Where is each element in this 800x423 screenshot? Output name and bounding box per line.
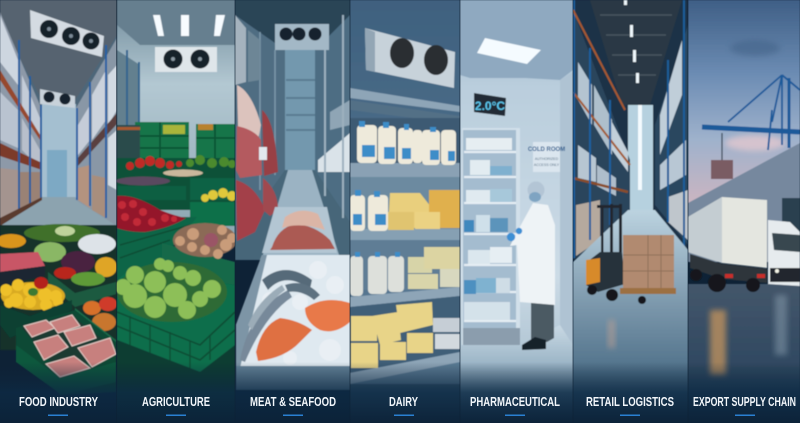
terminal building xyxy=(688,143,800,262)
cold room sign: COLD ROOM xyxy=(528,147,565,153)
left racks xyxy=(235,15,285,240)
label: food industry xyxy=(19,395,99,416)
label: retail logistics: RETAIL LOGISTICS xyxy=(586,395,674,409)
right racks xyxy=(315,15,350,222)
panel: pharmaceutical xyxy=(460,0,573,423)
evaporator unit xyxy=(365,28,455,88)
panel: export supply chain xyxy=(688,0,800,423)
left racks xyxy=(573,0,630,260)
label: dairy: DAIRY xyxy=(389,395,418,409)
label: pharmaceutical xyxy=(470,395,560,416)
label: pharmaceutical: PHARMACEUTICAL xyxy=(470,395,560,409)
label: export supply chain xyxy=(693,395,796,416)
hanging meat xyxy=(236,85,278,241)
truck cab xyxy=(768,220,800,286)
evaporator unit: rear xyxy=(40,89,75,108)
right wall xyxy=(560,72,573,345)
right pallet racks xyxy=(76,38,117,226)
green apple crate xyxy=(115,258,235,372)
shelving with medicine boxes xyxy=(462,128,520,346)
label: retail logistics xyxy=(586,395,674,416)
digital temperature display xyxy=(474,93,506,116)
mid rows of vegetables xyxy=(116,155,237,226)
butter blocks xyxy=(351,247,460,368)
technician xyxy=(507,182,555,350)
steel shelves xyxy=(350,88,460,384)
floor light reflection xyxy=(608,320,615,348)
evening sky xyxy=(688,0,800,215)
cold corridor xyxy=(235,0,350,260)
reflective floor xyxy=(460,325,573,423)
forklift with pallet xyxy=(586,204,676,304)
produce display xyxy=(0,224,117,350)
cold room sign: AUTHORIZED xyxy=(535,157,559,161)
ceiling panel light xyxy=(460,0,573,80)
label: agriculture xyxy=(142,395,210,416)
loading dock xyxy=(782,198,800,233)
digital temperature display: 2.0°C xyxy=(475,99,505,113)
fish and salmon on ice tray xyxy=(236,255,350,390)
suspended container xyxy=(711,160,733,179)
panel: retail logistics xyxy=(573,0,688,423)
panel: meat and seafood xyxy=(235,0,350,390)
room walls and ceiling xyxy=(117,0,235,240)
port crane xyxy=(702,75,800,160)
tomato crate xyxy=(117,196,197,282)
evaporator unit xyxy=(155,47,217,72)
dark floor xyxy=(117,340,235,388)
label: dairy xyxy=(389,395,418,416)
label: meat and seafood: MEAT & SEAFOOD xyxy=(250,395,336,409)
wet road xyxy=(688,284,800,423)
label: meat and seafood xyxy=(250,395,336,416)
cold room aisle background xyxy=(0,0,117,240)
label: food industry: FOOD INDUSTRY xyxy=(19,395,99,409)
cheese wedges xyxy=(388,190,460,230)
cold room sign: ACCESS ONLY xyxy=(534,163,560,167)
panel: food industry xyxy=(0,0,117,395)
wall background xyxy=(350,0,460,423)
right racks xyxy=(655,0,688,250)
cold room sign xyxy=(528,142,565,172)
warehouse hall xyxy=(573,0,688,250)
container truck xyxy=(688,197,767,292)
clean room walls xyxy=(460,70,573,346)
meat on ice tray xyxy=(262,207,337,253)
onion crate xyxy=(162,223,237,285)
panel: dairy xyxy=(350,0,460,423)
left pallet racks xyxy=(0,12,42,226)
polished floor xyxy=(573,210,688,423)
panel dividers xyxy=(116,0,688,423)
back stacked crates xyxy=(116,122,235,159)
evaporator unit: front xyxy=(30,10,104,57)
lower wall shadow xyxy=(350,384,460,392)
panel: agriculture xyxy=(116,0,235,388)
evaporator unit xyxy=(275,24,329,50)
packaged meat crate xyxy=(16,310,116,395)
label: agriculture: AGRICULTURE xyxy=(142,395,210,409)
bottom label band xyxy=(0,362,800,423)
milk jugs xyxy=(350,121,456,296)
